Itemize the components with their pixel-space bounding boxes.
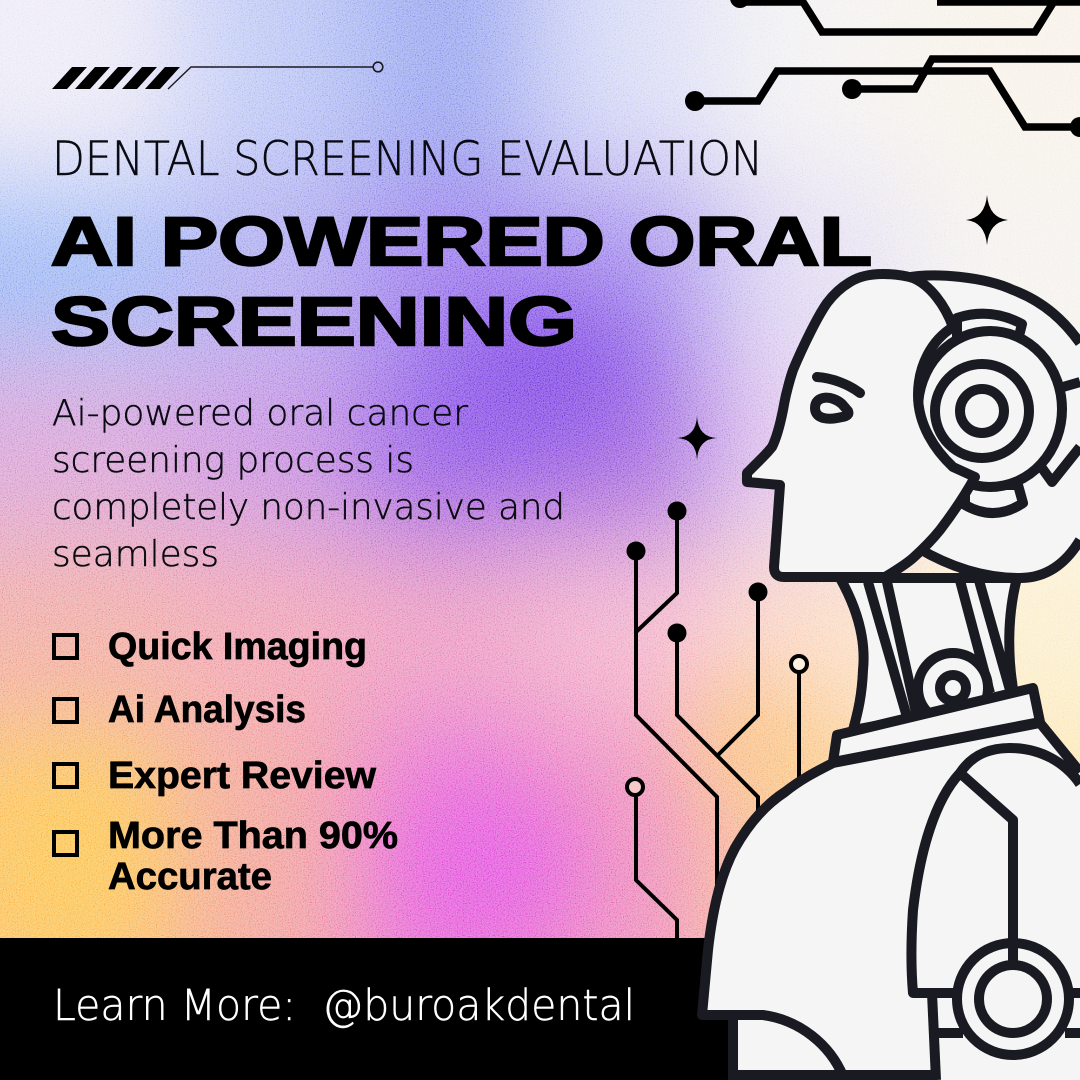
robot torso [702, 723, 1080, 1080]
footer bar [0, 938, 730, 1080]
robot illustration [702, 274, 1080, 1080]
title: AI POWERED ORAL [51, 203, 872, 280]
decorative stripes and line [52, 62, 383, 89]
circuit trace: middle [695, 71, 1080, 127]
checklist [54, 626, 398, 898]
robot neck [840, 573, 1017, 730]
description [52, 393, 565, 575]
item: ai analysis: Ai Analysis [108, 689, 306, 731]
eye and brow [815, 377, 860, 419]
robot back of head [905, 275, 1080, 578]
ear inner rings [935, 364, 1029, 458]
circuit trace: upper [740, 2, 1053, 32]
title [51, 203, 872, 360]
item: expert review: Expert Review [108, 755, 376, 797]
circuit trace: short [852, 59, 1080, 89]
top circuit lines [685, 0, 1080, 137]
circuit nodes [685, 0, 1080, 137]
sparkles [677, 195, 1008, 460]
item: accuracy [54, 815, 398, 898]
robot collar [833, 688, 1040, 762]
subtitle: DENTAL SCREENING EVALUATION [52, 132, 763, 187]
title: SCREENING [51, 283, 577, 360]
ear brackets [957, 314, 1080, 513]
robot face [747, 274, 975, 577]
description: completely non-invasive and [52, 487, 565, 528]
left circuit lines [626, 502, 807, 940]
ear ring [918, 331, 1062, 487]
circuit trace: top edge [937, 0, 1080, 6]
description: Ai-powered oral cancer [52, 393, 468, 434]
item: accuracy: Accurate [108, 856, 272, 898]
footer bar: Learn More: @buroakdental [53, 981, 635, 1031]
description: seamless [52, 534, 219, 575]
item: accuracy: More Than 90% [108, 815, 398, 857]
description: screening process is [52, 440, 414, 481]
item: quick imaging: Quick Imaging [108, 626, 367, 668]
